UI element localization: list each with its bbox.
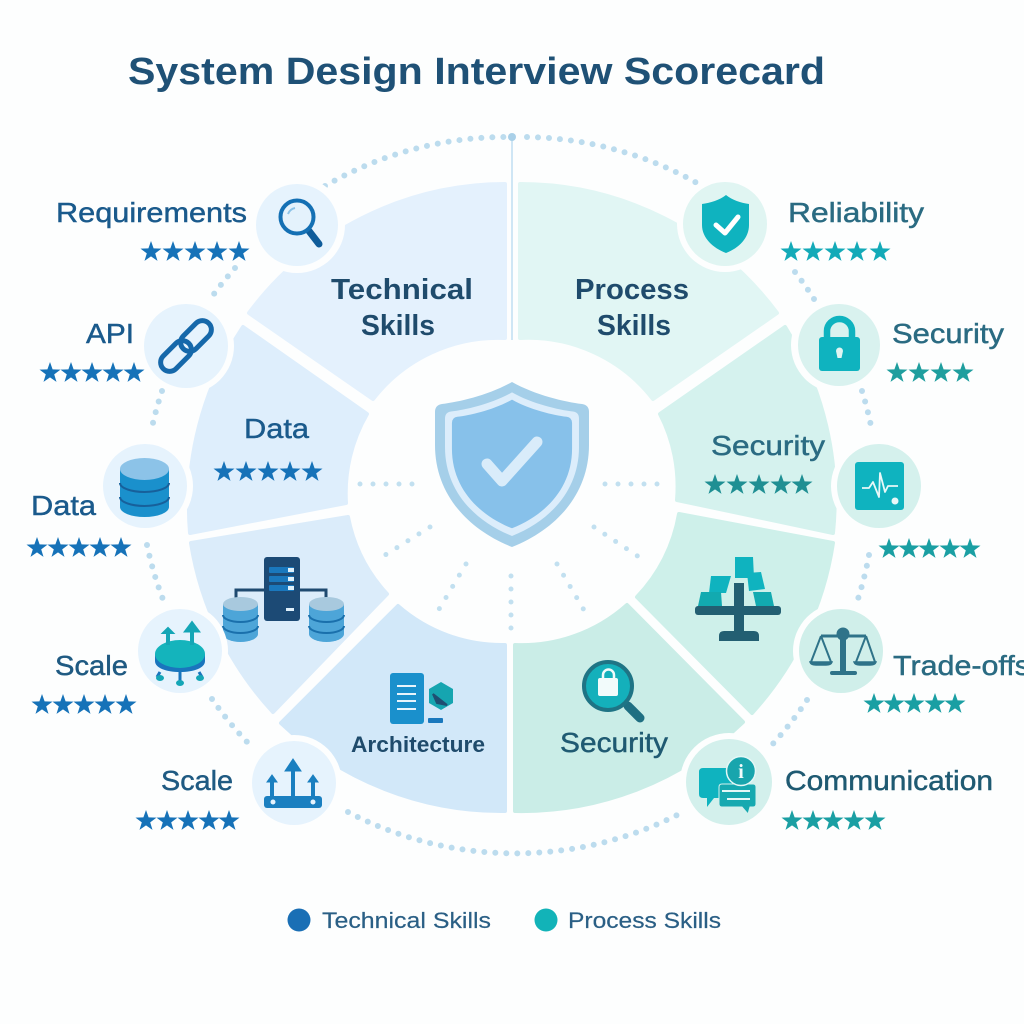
skill: security with lock	[791, 297, 1004, 393]
panel: security lower	[515, 605, 743, 811]
skill: scale with disc icon: Scale	[55, 650, 128, 681]
dotted outer ring	[147, 137, 872, 853]
skill: scale with arrows icon: Scale	[161, 765, 233, 796]
inner dotted spokes	[360, 484, 662, 637]
panel: servers	[191, 517, 387, 712]
top divider with node	[508, 133, 516, 340]
panel: data	[189, 327, 367, 533]
panel heading: process skills: Process	[575, 274, 689, 306]
skill: security with lock: Security	[892, 318, 1004, 349]
legend	[288, 908, 721, 933]
skill: communication	[680, 733, 993, 831]
skill: data: Data	[31, 490, 96, 521]
skill: data	[26, 438, 193, 557]
skill: requirements	[56, 177, 345, 273]
skill: scale with arrows icon	[136, 735, 342, 831]
panel: security upper	[660, 327, 835, 533]
icon: balance with blocks	[695, 557, 781, 641]
skill: monitoring	[831, 438, 980, 558]
legend: Technical Skills	[322, 908, 491, 933]
skill: reliability: Reliability	[788, 197, 924, 228]
skill: scale with disc icon	[32, 603, 228, 714]
panel label: security upper: Security	[711, 430, 825, 461]
skill: requirements: Requirements	[56, 197, 247, 228]
icon: architecture document and hexagon	[390, 673, 453, 724]
panel heading: process skills	[575, 274, 689, 342]
panel: process skills	[520, 184, 777, 399]
panel stars: security upper	[704, 474, 812, 494]
panel label: architecture: Architecture	[351, 732, 485, 757]
title: System Design Interview Scorecard	[128, 51, 825, 93]
skill: communication: Communication	[785, 765, 993, 796]
panel heading: technical skills	[331, 274, 473, 342]
skill: communication: i	[738, 761, 744, 783]
panel stars: data	[214, 461, 322, 481]
panel: architecture	[281, 606, 505, 811]
panel: technical skills	[249, 184, 505, 399]
panel label: security lower: Security	[560, 727, 668, 758]
skill: trade-offs	[793, 603, 1024, 713]
panel heading: technical skills: Skills	[361, 310, 435, 342]
skill: api: API	[86, 318, 134, 349]
icon: servers and databases	[223, 557, 344, 642]
legend: Process Skills	[568, 908, 721, 933]
skill: trade-offs: Trade-offs	[893, 650, 1024, 681]
skill: api	[40, 298, 234, 394]
icon: security magnifier with lock	[584, 662, 640, 718]
panel label: data: Data	[244, 413, 309, 444]
panel: balance	[637, 514, 833, 713]
panel heading: process skills: Skills	[597, 310, 671, 342]
skill: reliability	[677, 176, 924, 272]
central shield	[435, 382, 589, 547]
panel heading: technical skills: Technical	[331, 274, 473, 306]
